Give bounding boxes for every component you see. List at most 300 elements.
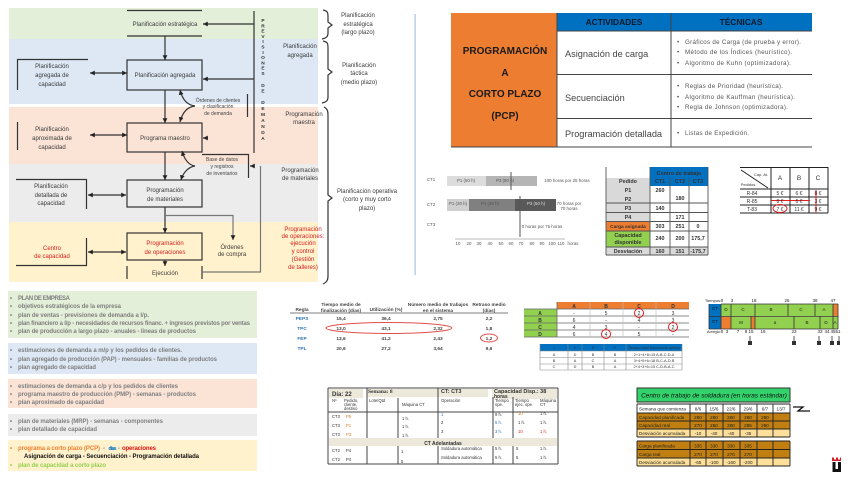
table: operations schedule: 1 h. bbox=[518, 420, 525, 425]
band labels: Programación bbox=[281, 168, 319, 174]
table: assignment matrix bbox=[740, 167, 828, 213]
table: setup matrix: A bbox=[572, 304, 576, 310]
chart: load gantt: horas bbox=[568, 241, 579, 246]
table: assignment matrix: 6 € bbox=[796, 199, 803, 205]
node: detailed capacity bbox=[16, 180, 86, 209]
chart: machine gantt: 7 bbox=[737, 329, 740, 334]
table: operations schedule: P1 bbox=[346, 423, 352, 428]
node: approximate capacity: Planificación bbox=[35, 127, 69, 133]
panel: PCP activities and techniques table: • bbox=[677, 130, 679, 137]
braces: planning horizons bbox=[322, 10, 398, 284]
table: operations schedule: 3 h. bbox=[495, 429, 502, 434]
chart: machine gantt: 0 bbox=[721, 329, 724, 334]
table: priority rules: PEPS bbox=[296, 316, 309, 322]
table: operations schedule: Capacidad Disp.: 38 bbox=[494, 389, 546, 395]
panel: PCP activities and techniques table: PROGRAMACIÓN bbox=[463, 44, 547, 57]
vertical label: demand forecasts: N bbox=[261, 124, 265, 130]
table: priority rules: 1,8 bbox=[486, 326, 493, 332]
note: peach bbox=[8, 379, 257, 408]
chart: machine gantt: 0 bbox=[721, 298, 724, 303]
table: operations schedule: 1 h. bbox=[402, 424, 409, 429]
chart: load gantt: CT1 bbox=[427, 177, 436, 182]
chart: machine gantt: B bbox=[805, 320, 809, 325]
note text: short-term programme: • bbox=[10, 463, 12, 469]
note text: • bbox=[10, 384, 12, 390]
chart: load gantt: P3 (50 h) bbox=[527, 201, 546, 206]
band labels: (Gestión bbox=[292, 257, 314, 263]
table: welding work centre: 280 bbox=[761, 423, 769, 428]
table: welding work centre: -10 bbox=[695, 431, 702, 436]
note text: short-term programme: programa a corto plazo (PCP) bbox=[18, 446, 100, 452]
note text: • bbox=[10, 400, 12, 406]
chart: machine gantt: 3 bbox=[726, 329, 729, 334]
band: operations bbox=[9, 222, 318, 282]
note: purchase orders bbox=[218, 244, 247, 258]
node: aggregate capacity: capacidad bbox=[38, 82, 66, 88]
node: detailed capacity: Planificación bbox=[34, 184, 68, 190]
panel: business plan notes bbox=[8, 291, 257, 471]
table: operations schedule: CT2 bbox=[332, 457, 341, 462]
chart: machine gantt: 9 bbox=[745, 329, 748, 334]
chart: machine gantt: A bbox=[822, 307, 826, 312]
node: approximate capacity: capacidad bbox=[38, 145, 66, 151]
table: operations schedule: 1 h. bbox=[540, 455, 547, 460]
note text: • bbox=[10, 357, 12, 363]
chart: load gantt: 90 bbox=[540, 241, 545, 246]
table: operations schedule: CT3 bbox=[332, 432, 341, 437]
table: operations schedule: 1 h. bbox=[540, 446, 547, 451]
vertical label: demand forecasts: D bbox=[261, 100, 265, 106]
table: setup matrix: A bbox=[538, 311, 542, 317]
chart: machine gantt: 16 bbox=[760, 329, 766, 334]
table: welding work centre: 250 bbox=[710, 423, 718, 428]
note text: short-term programme: días bbox=[108, 446, 117, 452]
table: setup matrix: D bbox=[538, 332, 542, 338]
panel: PCP activities and techniques table: Secuenciación bbox=[565, 93, 625, 103]
panel: planning hierarchy diagram bbox=[9, 8, 325, 282]
chart: machine gantt: CT bbox=[712, 306, 718, 311]
table: assignment matrix: T-83 bbox=[747, 207, 757, 213]
note text: short-term programme: operaciones bbox=[122, 446, 157, 452]
note text: short-term programme: Asignación de carga - Secuenciación - Programación detallada bbox=[24, 454, 200, 460]
chart: load gantt: P1 (50 h) bbox=[457, 178, 476, 183]
note text: short-term programme: - bbox=[103, 446, 105, 452]
note text: short-term programme bbox=[10, 446, 200, 469]
table: work-centre load: CT3 bbox=[693, 179, 703, 185]
table: operations schedule: horas bbox=[494, 394, 508, 400]
table: setup matrix: - bbox=[638, 325, 640, 331]
table: sequence tours: i bbox=[554, 346, 555, 350]
node: approximate capacity bbox=[18, 122, 73, 151]
table: operations schedule: 1 h. bbox=[540, 420, 547, 425]
band labels: y control bbox=[292, 249, 314, 255]
table: sequence tours bbox=[540, 344, 682, 370]
node: aggregate planning: Planificación agregada bbox=[135, 73, 196, 79]
table: operations schedule: 5 h. bbox=[495, 420, 502, 425]
chart: machine gantt: C bbox=[799, 307, 803, 312]
table: sequence tours: D bbox=[574, 353, 577, 357]
node: operations schedule: Programación bbox=[146, 241, 184, 247]
table: setup matrix: - bbox=[672, 332, 674, 338]
note text: • bbox=[10, 365, 12, 371]
band labels: Programación bbox=[284, 227, 322, 233]
table: welding work centre: Capacidad real bbox=[639, 423, 670, 428]
table: welding work centre: Capacidad planificada bbox=[639, 415, 685, 420]
table: welding work centre: 335 bbox=[744, 444, 752, 448]
table: sequence tours: C bbox=[553, 365, 556, 369]
note: purchase orders: Órdenes bbox=[220, 244, 244, 251]
chart: load gantt: 80 bbox=[530, 241, 535, 246]
table: welding work centre: 6/7 bbox=[762, 406, 769, 412]
note text: PLAN DE EMPRESA bbox=[18, 296, 71, 302]
band labels: de materiales bbox=[282, 176, 318, 182]
node: capacity centre: Centro bbox=[43, 246, 62, 252]
table: assignment matrix: 9 € bbox=[815, 207, 822, 213]
band: aggregate bbox=[9, 39, 318, 104]
table: priority rules: Regla bbox=[295, 307, 309, 313]
vertical label: demand forecasts: D bbox=[261, 83, 265, 89]
braces: planning horizons: (medio plazo) bbox=[341, 80, 377, 86]
node: operations schedule bbox=[127, 233, 202, 260]
chart: machine gantt: 26 bbox=[784, 298, 790, 303]
panel: PCP activities and techniques table: Regla de Johnson (optimizadora). bbox=[685, 104, 788, 111]
note text: • bbox=[10, 348, 12, 354]
note text: plan agregado de producción (PAP) - mensuales - familias de productos bbox=[18, 357, 218, 363]
chart: load gantt: 60 bbox=[509, 241, 514, 246]
note text: plan financiero a l/p - necesidades de recursos financ. + ingresos previstos por ventas bbox=[18, 321, 251, 327]
band: strategic bbox=[9, 8, 318, 39]
table: setup matrix: C bbox=[538, 325, 542, 331]
table: operations schedule: 3 bbox=[441, 429, 444, 434]
table: setup matrix: - bbox=[573, 311, 575, 317]
chart: machine gantt: a bbox=[774, 320, 777, 325]
panel: PCP activities and techniques table bbox=[451, 13, 812, 147]
chart: load gantt: 110 bbox=[558, 241, 565, 246]
table: setup matrix: 4 bbox=[605, 332, 608, 338]
note text: plan de producción a largo plazo - anuales - líneas de productos bbox=[18, 329, 197, 335]
table: work-centre load: Centro de trabajo bbox=[657, 171, 702, 177]
note text: short-term programme: - bbox=[118, 446, 120, 452]
chart: load gantt bbox=[427, 172, 591, 246]
panel: PCP activities and techniques table: Algoritmo de Kuhn (optimizadora). bbox=[685, 60, 791, 67]
node: materials schedule: de materiales bbox=[147, 197, 183, 203]
table: welding work centre bbox=[637, 388, 790, 466]
note text: plan agregado de capacidad bbox=[18, 365, 96, 371]
table: welding work centre: Centro de trabajo de soldadura (en horas estándar) bbox=[641, 392, 787, 400]
table: operations schedule: destino bbox=[344, 406, 358, 411]
panel: PCP activities and techniques table: Gráficos de Carga (de prueba y error). bbox=[685, 39, 801, 46]
table: assignment matrix: B bbox=[797, 175, 801, 182]
note text: estimaciones de demanda a c/p y los pedidos de clientes bbox=[18, 384, 179, 390]
node: capacity centre: de capacidad bbox=[34, 254, 70, 260]
chart: machine gantt: 45 bbox=[830, 329, 836, 334]
node: strategic planning bbox=[127, 10, 202, 36]
note text: • bbox=[10, 392, 12, 398]
panel: PCP activities and techniques table: • bbox=[677, 49, 679, 56]
table: operations schedule: Máquina bbox=[540, 398, 557, 403]
chart: load gantt: 70 bbox=[519, 241, 524, 246]
panel: PCP activities and techniques table: (PCP) bbox=[491, 111, 519, 122]
table: welding work centre: 13/7 bbox=[777, 406, 786, 412]
chart: load gantt: CT2 bbox=[427, 202, 436, 207]
note: customer orders: Órdenes de clientes bbox=[196, 97, 241, 104]
table: work-centre load: 160 bbox=[656, 249, 664, 255]
band labels: Programación bbox=[285, 112, 323, 118]
table: operations schedule: Operación bbox=[441, 398, 461, 403]
chart: load gantt: 40 bbox=[488, 241, 493, 246]
table: welding work centre: 280 bbox=[727, 415, 735, 420]
table: operations schedule: 5 h. bbox=[495, 455, 502, 460]
note: database bbox=[202, 154, 248, 178]
table: priority rules: 3,64 bbox=[433, 346, 443, 352]
mark: arrow beside welding table bbox=[793, 407, 810, 411]
table: work-centre load: P1 bbox=[625, 188, 631, 194]
note text bbox=[10, 296, 251, 433]
note: database: y registros bbox=[210, 164, 234, 170]
table: operations schedule: 1 h. bbox=[402, 433, 409, 438]
table: welding work centre: Carga planificada bbox=[639, 444, 675, 448]
braces: planning horizons: (corto y muy corto bbox=[343, 197, 392, 203]
arrows bbox=[88, 11, 260, 272]
chart: load gantt: 20 bbox=[467, 241, 472, 246]
table: welding work centre: 8/6 bbox=[695, 406, 702, 412]
table: sequence tours: A bbox=[614, 365, 617, 369]
panel: PCP activities and techniques table: • bbox=[677, 94, 679, 101]
table: welding work centre: 280 bbox=[727, 423, 735, 428]
table: welding work centre: 280 bbox=[694, 415, 702, 420]
table: sequence tours: 3+4+5+6=18 B-C-A-D-B bbox=[634, 359, 675, 363]
table: operations schedule: Día: 22 bbox=[332, 392, 352, 398]
node: execution: Ejecución bbox=[152, 271, 178, 277]
chart: machine gantt bbox=[705, 298, 841, 345]
note: database: de inventarios bbox=[206, 171, 238, 177]
table: assignment matrix: 8 € bbox=[777, 199, 784, 205]
table: priority rules: 2,32 bbox=[433, 326, 443, 332]
table: work-centre load: CT1 bbox=[655, 179, 665, 185]
panel: PCP activities and techniques table: Listas de Expedición. bbox=[685, 130, 749, 137]
chart: load gantt: 100 bbox=[548, 241, 556, 246]
note text: short-term programme: • bbox=[10, 446, 12, 452]
node: master schedule: Programa maestro bbox=[140, 136, 191, 142]
node: aggregate planning bbox=[127, 60, 202, 90]
table: work-centre load: Pedido bbox=[619, 179, 638, 185]
table: work-centre load: Carga asignada bbox=[610, 224, 646, 230]
table: operations schedule: 5 bbox=[516, 455, 519, 460]
node: materials schedule: Programación bbox=[146, 188, 184, 194]
note text: plan aproximado de capacidad bbox=[18, 400, 104, 406]
table: work-centre load: 175,7 bbox=[691, 236, 705, 242]
chart: load gantt: 70 horas por bbox=[557, 201, 582, 206]
table: operations schedule: CT2 bbox=[332, 448, 341, 453]
table: priority rules: Utilización (%) bbox=[370, 307, 403, 313]
note text: estimaciones de demanda a m/p y los pedidos de clientes. bbox=[18, 348, 182, 354]
node: operations schedule: de operaciones bbox=[144, 250, 186, 256]
chart: load gantt: P1 (30 h) bbox=[449, 201, 468, 206]
table: sequence tours: t* bbox=[574, 346, 577, 350]
table: operations schedule: Soldadura automática bbox=[441, 455, 482, 460]
table: setup matrix: 3 bbox=[672, 318, 675, 324]
node: master schedule bbox=[127, 123, 202, 152]
vertical label: demand forecasts: A bbox=[261, 136, 265, 142]
table: welding work centre: Carga real bbox=[639, 452, 660, 457]
table: operations schedule: ejec. ope. bbox=[515, 402, 533, 407]
note: green bbox=[8, 291, 257, 338]
table: welding work centre: -40 bbox=[711, 431, 718, 436]
note text: • bbox=[10, 304, 12, 310]
table: work-centre load: 0 bbox=[696, 224, 700, 230]
table: work-centre load: P3 bbox=[625, 206, 631, 212]
panel: PCP activities and techniques table: • bbox=[677, 104, 679, 111]
table: welding work centre: 280 bbox=[710, 415, 718, 420]
vertical label: demand forecasts: A bbox=[261, 118, 265, 124]
band: materials bbox=[9, 164, 318, 222]
table: assignment matrix: 6 € bbox=[796, 191, 803, 197]
braces: planning horizons: Planificación bbox=[341, 13, 375, 19]
vertical label: demand forecasts: I bbox=[262, 50, 264, 56]
chart: machine gantt: C bbox=[741, 307, 745, 312]
table: welding work centre: -160 bbox=[726, 460, 736, 465]
node: aggregate capacity: agregada de bbox=[35, 73, 70, 79]
table: priority rules: 2,2 bbox=[486, 316, 493, 322]
table: welding work centre: 29/6 bbox=[744, 406, 753, 412]
table: setup matrix: 5 bbox=[605, 311, 608, 317]
table: priority rules: FEP bbox=[297, 336, 307, 342]
table: work-centre load: 260 bbox=[656, 188, 664, 194]
table: work-centre load: 251 bbox=[676, 224, 684, 230]
table: welding work centre: Desviación acumulada bbox=[639, 460, 686, 465]
table: operations schedule: Máquina CT bbox=[402, 402, 425, 407]
table: sequence tours: D bbox=[574, 365, 577, 369]
table: welding work centre: 22/6 bbox=[727, 406, 736, 412]
table: welding work centre: -100 bbox=[709, 460, 719, 465]
vertical label: demand forecasts: R bbox=[261, 23, 265, 29]
table: operations schedule: 10 bbox=[518, 429, 523, 434]
table: assignment matrix: Cap. At. bbox=[754, 172, 768, 177]
table: priority rules: finalización (días) bbox=[321, 308, 362, 314]
table: operations schedule: 5 bbox=[401, 459, 404, 464]
table: welding work centre: -200 bbox=[743, 460, 753, 465]
braces: planning horizons: Planificación bbox=[342, 63, 376, 69]
table: assignment matrix: R-85 bbox=[747, 199, 758, 205]
table: setup matrix: B bbox=[604, 304, 608, 310]
table: welding work centre: -65 bbox=[695, 460, 702, 465]
chart: load gantt: CT3 bbox=[427, 222, 436, 227]
chart: load gantt: 10 bbox=[456, 241, 461, 246]
table: welding work centre: -35 bbox=[745, 431, 752, 436]
vertical label: demand forecasts: D bbox=[261, 130, 265, 136]
note text: • bbox=[10, 321, 12, 327]
band labels: Planificación bbox=[283, 44, 317, 50]
table: work-centre load: 140 bbox=[656, 206, 664, 212]
table: welding work centre: 280 bbox=[761, 415, 769, 420]
note text: • bbox=[10, 313, 12, 319]
table: priority rules: 15,4 bbox=[336, 316, 346, 322]
band labels bbox=[281, 44, 325, 271]
vertical label: demand forecasts: E bbox=[261, 88, 265, 94]
note: customer orders bbox=[196, 94, 248, 117]
table: operations schedule bbox=[328, 388, 558, 464]
chart: machine gantt: D bbox=[824, 320, 828, 325]
table: assignment matrix: 8 € bbox=[815, 191, 822, 197]
table: operations schedule: P4 bbox=[346, 457, 352, 462]
table: operations schedule: 10 bbox=[518, 411, 523, 416]
chart: machine gantt: CT bbox=[712, 319, 718, 324]
table: operations schedule: Pedido, bbox=[344, 398, 358, 403]
table: work-centre load: 180 bbox=[676, 196, 684, 202]
table: priority rules: 20,6 bbox=[336, 346, 346, 352]
chart: machine gantt: Arreglo: bbox=[707, 329, 721, 334]
node: strategic planning: Planificación estratégica bbox=[133, 22, 198, 28]
table: welding work centre: 270 bbox=[727, 452, 735, 457]
table: work-centre load: P4 bbox=[625, 215, 631, 221]
table: welding work centre: 15/6 bbox=[710, 406, 719, 412]
note text: short-term programme: plan de capacidad a corto plazo bbox=[18, 463, 106, 469]
note: blue bbox=[8, 343, 257, 374]
table: operations schedule: ope. bbox=[495, 402, 503, 407]
note: gray bbox=[8, 414, 257, 436]
table: operations schedule: 1 h. bbox=[402, 416, 409, 421]
note text: plan de materiales (MRP) - semanas - componentes bbox=[18, 419, 164, 425]
chart: machine gantt: 44 bbox=[824, 329, 830, 334]
table: operations schedule: Lote/Qtd bbox=[369, 398, 386, 403]
note: purchase orders: de compra bbox=[218, 252, 247, 258]
note: customer orders: y clasificación bbox=[203, 104, 234, 110]
table: priority rules: 9,6 bbox=[486, 346, 493, 352]
table: assignment matrix: 11 € bbox=[794, 207, 804, 213]
table: operations schedule: 1 h. bbox=[540, 411, 547, 416]
chart: machine gantt: B bbox=[769, 307, 773, 312]
table: operations schedule: CT Adelantadas bbox=[424, 441, 462, 447]
table: sequence tours: C bbox=[592, 359, 595, 363]
table: work-centre load: 200 bbox=[676, 236, 684, 242]
table: operations schedule: Semana: 8 bbox=[368, 389, 393, 395]
table: operations schedule: Soldadura automática bbox=[441, 446, 482, 451]
chart: machine gantt: A bbox=[833, 320, 837, 325]
note: yellow bbox=[8, 440, 257, 471]
node: detailed capacity: capacidad bbox=[37, 201, 65, 207]
chart: machine gantt: M bbox=[739, 320, 743, 325]
table: sequence tours: 2+4+3+6=15 C-D-B-A-C bbox=[634, 365, 675, 369]
note text: • bbox=[10, 427, 12, 433]
table: welding work centre: 270 bbox=[694, 423, 702, 428]
vertical label: demand forecasts: E bbox=[261, 29, 265, 35]
note text: • bbox=[10, 419, 12, 425]
note text: • bbox=[10, 329, 12, 335]
note text: plan detallado de capacidad bbox=[18, 427, 97, 433]
table: operations schedule: 5 h. bbox=[495, 446, 502, 451]
table: welding work centre: 280 bbox=[744, 415, 752, 420]
node: aggregate capacity bbox=[18, 60, 88, 90]
table: work-centre load bbox=[606, 167, 708, 255]
vertical label: demand forecasts: P bbox=[261, 18, 265, 24]
table: priority rules: 2,43 bbox=[433, 336, 443, 342]
vertical label: demand forecasts: V bbox=[261, 34, 265, 40]
chart: machine gantt: 3 bbox=[731, 298, 734, 303]
table: welding work centre: 270 bbox=[694, 452, 702, 457]
table: operations schedule: CT3 bbox=[332, 423, 341, 428]
node: approximate capacity: aproximada de bbox=[32, 136, 73, 142]
table: operations schedule: Nº bbox=[332, 398, 337, 403]
note text: programa maestro de producción (PMP) - semanas - productos bbox=[18, 392, 197, 398]
braces: planning horizons: estratégica bbox=[343, 22, 373, 28]
table: assignment matrix: A bbox=[778, 175, 783, 182]
note: database: Base de datos bbox=[206, 157, 238, 163]
table: priority rules: Retraso medio bbox=[472, 302, 506, 308]
table: setup matrix: 6 bbox=[573, 332, 576, 338]
table: priority rules: 13,0 bbox=[336, 326, 346, 332]
table: sequence tours: t* bbox=[592, 346, 595, 350]
panel: PCP activities and techniques table: A bbox=[501, 68, 509, 79]
